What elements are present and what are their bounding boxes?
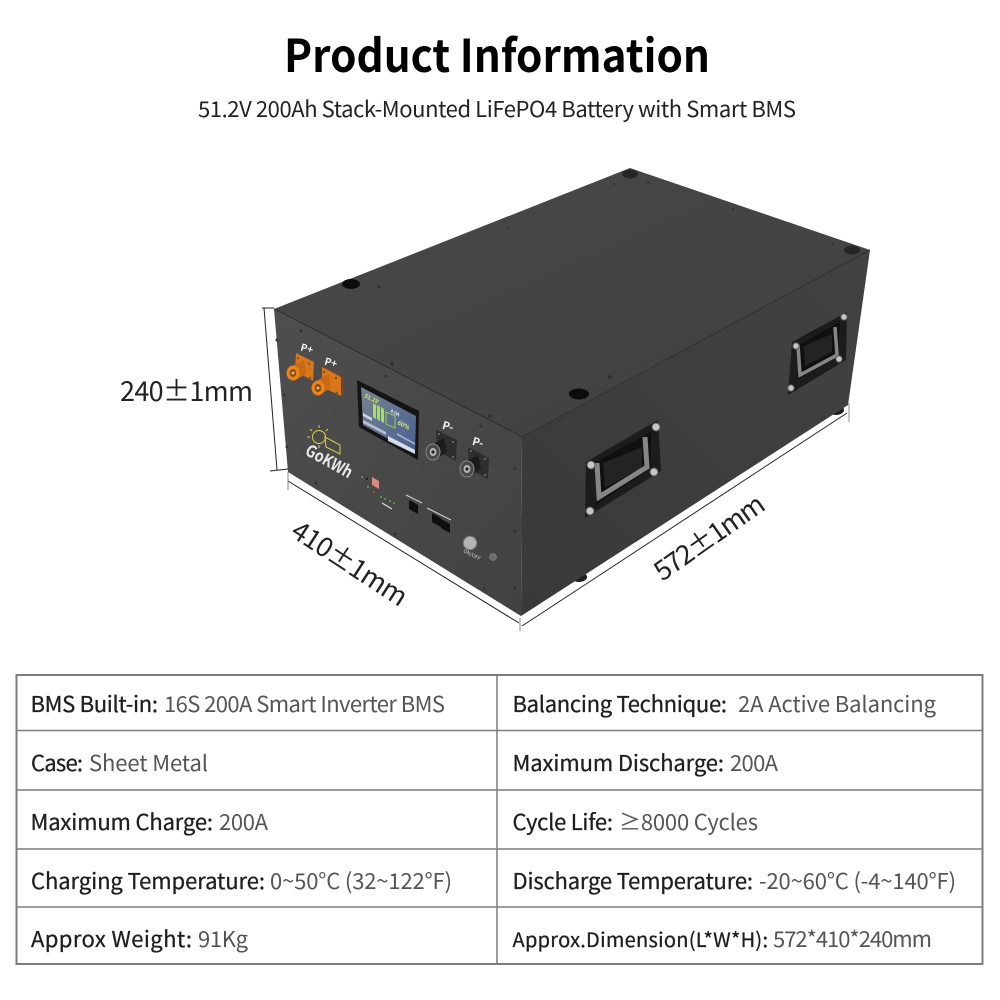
- foot: rear: [828, 405, 844, 415]
- spec: charging temperature: 0~50°C (32~122°F): [270, 864, 452, 896]
- power button: ON/OFF: [462, 548, 482, 562]
- ground stud: [490, 554, 496, 560]
- battery right side face: [521, 250, 870, 616]
- communication ports: CAN: [427, 508, 451, 533]
- battery top face: [274, 168, 870, 437]
- subtitle: 51.2V 200Ah Stack-Mounted LiFePO4 Battery with Smart BMS: [198, 92, 796, 124]
- foot: front: [571, 572, 587, 582]
- dimension: width: [285, 472, 520, 631]
- spec: max charge: Maximum Charge:: [30, 805, 213, 837]
- spec: charging temperature: Charging Temperature:: [31, 864, 265, 896]
- spec: weight: Approx Weight:: [31, 922, 192, 954]
- spec: BMS: BMS Built-in:: [30, 687, 158, 719]
- spec: balancing: 2A Active Balancing: [738, 687, 937, 719]
- dimension: height: [120, 308, 288, 471]
- dimension: height: 240±1mm: [120, 370, 253, 409]
- spec: dimension: 572*410*240mm: [773, 922, 932, 954]
- connector: P+ 2: [312, 353, 344, 396]
- spec: dimension: Approx.Dimension(L*W*H):: [512, 924, 768, 953]
- specification table: [16, 675, 983, 964]
- LCD display: 51.2V: [363, 392, 381, 406]
- LCD display: 0.0A: [389, 408, 401, 418]
- spec: max charge: 200A: [219, 805, 269, 837]
- indicator LEDs and dial switch: [361, 476, 395, 509]
- carry handle: rear: [788, 312, 847, 395]
- connector: P+ 1: P+: [299, 339, 315, 357]
- connector: P- 1: [426, 417, 457, 461]
- communication port: RS485: [406, 495, 422, 514]
- dimension: length: [522, 403, 849, 626]
- LCD display: 60%: [396, 418, 412, 432]
- power button: [462, 536, 482, 562]
- connector: P+ 1: [286, 339, 315, 381]
- battery front panel: [274, 309, 522, 616]
- spec: discharge temperature: Discharge Temperature:: [512, 864, 753, 896]
- dimension: length: 572±1mm: [645, 483, 772, 588]
- title: Product Information: [284, 20, 710, 85]
- battery product illustration: [274, 168, 870, 616]
- connector: P- 1: P-: [441, 417, 455, 435]
- brand logo: [302, 425, 358, 483]
- spec: max discharge: 200A: [730, 746, 779, 778]
- spec: max discharge: Maximum Discharge:: [512, 746, 724, 778]
- connector: P+ 2: P+: [323, 353, 339, 371]
- dimension: width: 410±1mm: [285, 509, 417, 614]
- LCD display: [357, 380, 419, 460]
- connector: P- 2: P-: [471, 433, 485, 451]
- carry handle: front: [585, 420, 661, 518]
- spec: weight: 91Kg: [198, 922, 249, 954]
- spec: cycle life: Cycle Life:: [512, 805, 613, 837]
- connector: P- 2: [460, 433, 489, 479]
- spec: balancing: Balancing Technique:: [512, 687, 727, 719]
- brand logo: GoKWh: [302, 437, 358, 483]
- spec: case: Sheet Metal: [89, 746, 208, 778]
- spec: cycle life: ≥8000 Cycles: [619, 805, 758, 837]
- spec: BMS: 16S 200A Smart Inverter BMS: [164, 687, 445, 719]
- spec: discharge temperature: -20~60°C (-4~140°F): [759, 864, 956, 896]
- spec: case: Case:: [31, 746, 83, 778]
